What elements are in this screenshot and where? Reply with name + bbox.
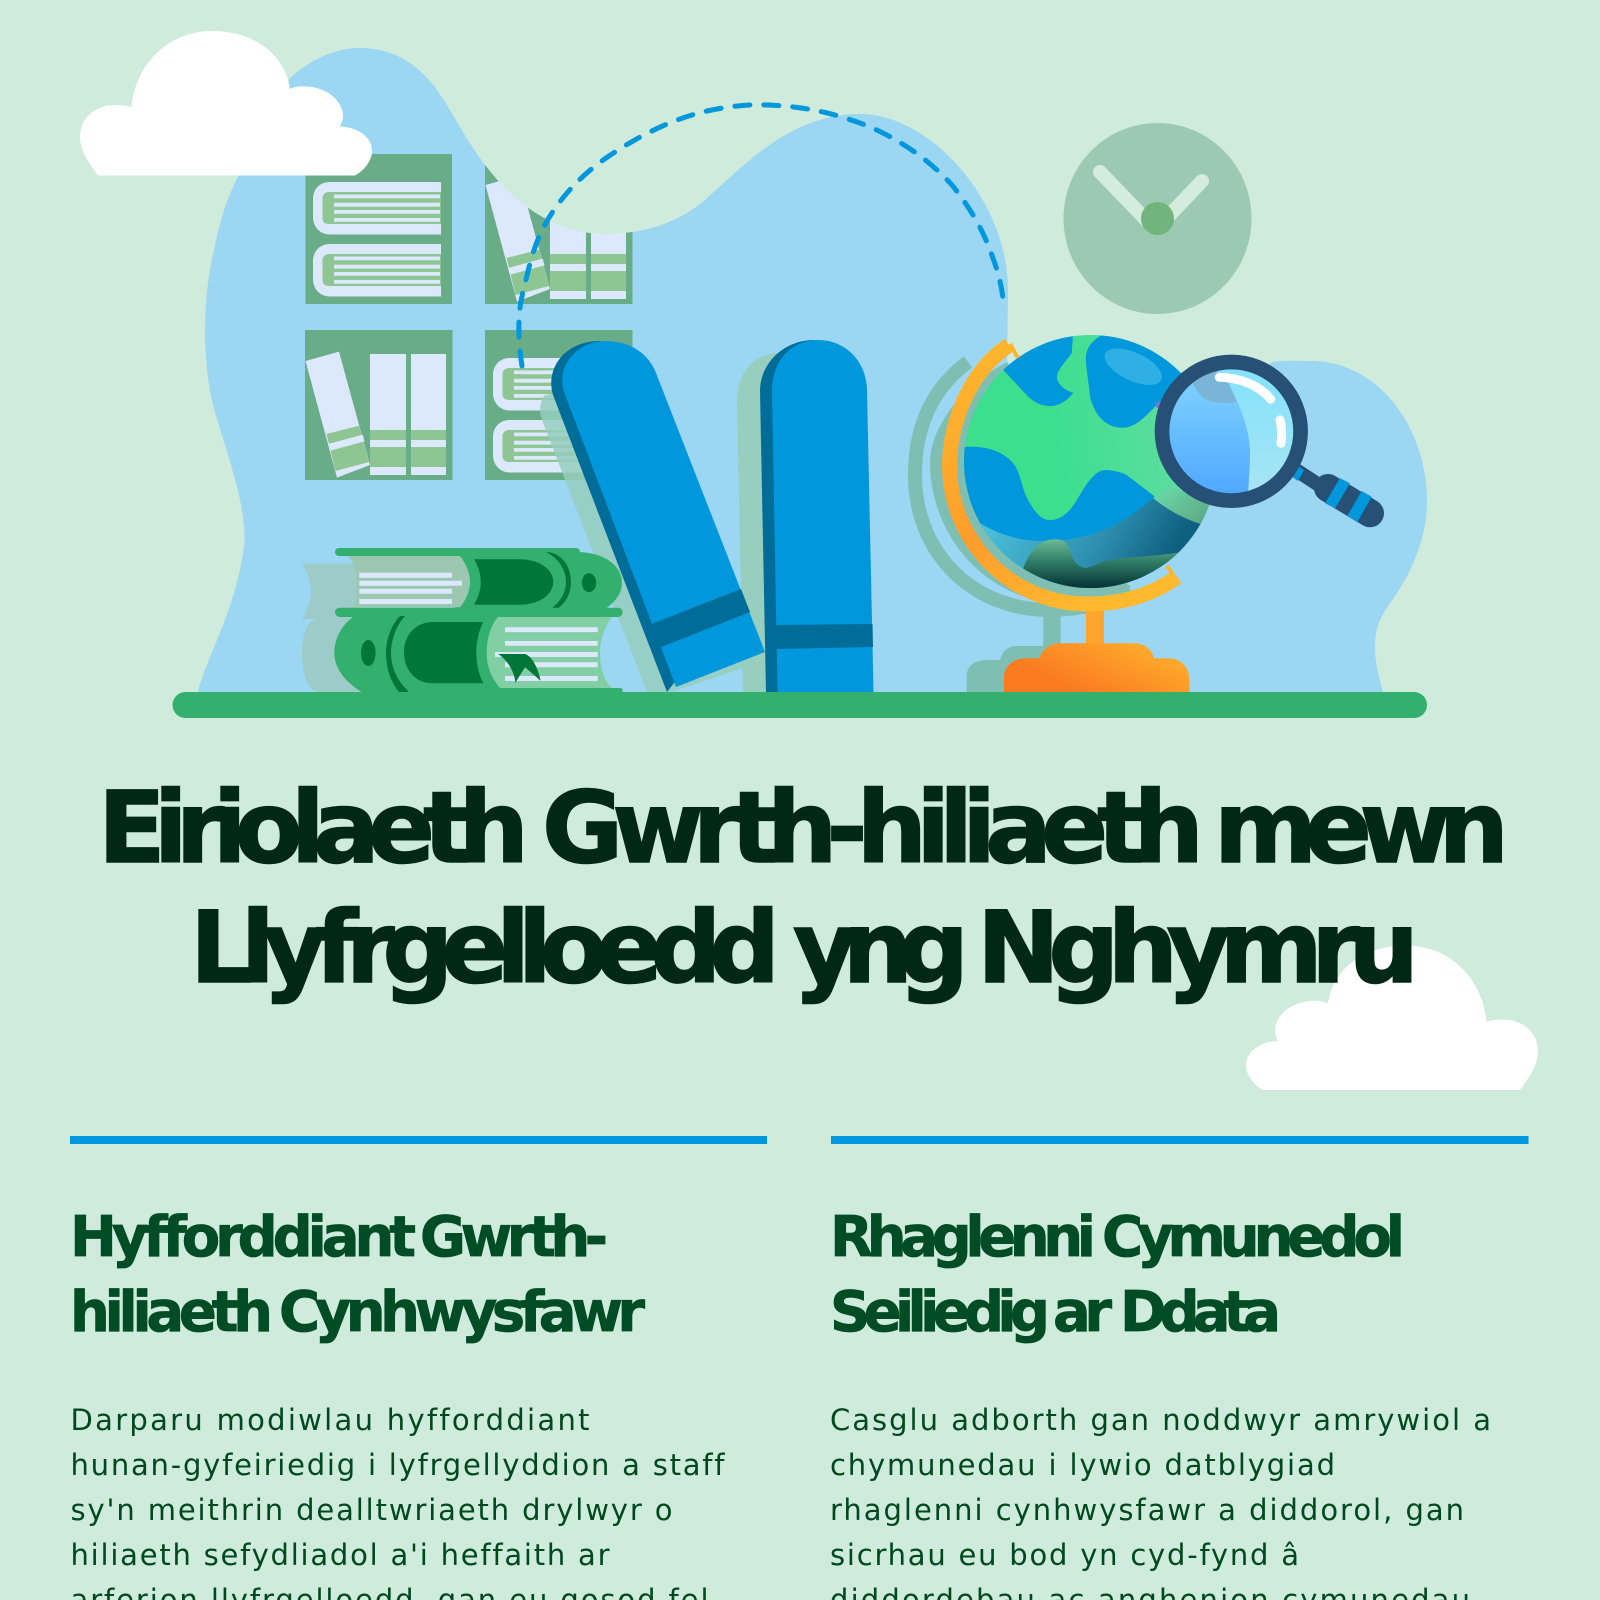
magnifying glass [1156,360,1372,522]
body text left: sy'n meithrin dealltwriaeth drylwyr o [70,1493,672,1527]
body text left: hiliaeth sefydliadol a'i heffaith ar [70,1538,610,1572]
background notch cutting the shelf [435,60,707,234]
title: Eiriolaeth [98,771,529,886]
background blue blob [198,48,1427,692]
heading right: Cymunedol [1102,1205,1405,1270]
heading left: Gwrth- [420,1205,608,1270]
book shadows [302,564,364,692]
divider left [70,1136,767,1144]
panel: right column [830,1136,1528,1600]
earth sphere [964,335,1210,588]
heading left: hiliaeth [70,1280,273,1345]
bookshelf bottom-left: upright books [305,330,452,480]
heading left: Cynhwysfawr [279,1280,645,1345]
leaning blue book [551,341,765,692]
title: Nghymru [977,891,1419,1006]
globe edge spot [1156,402,1162,408]
magnifier handle [1290,465,1372,522]
upright blue book [760,340,874,693]
bookshelf top-left: horizontal books [306,154,452,304]
body text right: chymunedau i lywio datblygiad [830,1448,1335,1482]
title: yng [793,891,969,1006]
bookmark [498,654,541,683]
magnifier lens [1169,369,1293,494]
bookshelf top-right: upright books [485,154,632,304]
body text left [70,1403,725,1600]
divider right [831,1136,1528,1144]
globe shadow [915,362,1131,692]
cloud right, behind title [1246,946,1538,1090]
globe orange meridian arc [950,344,1178,604]
cloud top left [80,31,372,176]
body text right: rhaglenni cynhwysfawr a diddorol, gan [830,1493,1464,1527]
illustration: library scene [172,48,1427,718]
heading right: Ddata [1120,1280,1281,1345]
bottom book [334,617,505,692]
top book [455,552,622,609]
title [98,771,1509,1006]
body text right: Casglu adborth gan noddwyr amrywiol a [830,1403,1491,1437]
dashed flight path arc [519,105,1003,366]
heading right: ar [1053,1280,1112,1345]
book shadows behind the tall books [540,353,820,692]
body text left: Darparu modiwlau hyfforddiant [70,1403,590,1437]
shelf ground bar [172,692,1427,718]
bookshelf bottom-right: horizontal books [485,330,632,480]
lens highlights [1219,377,1282,443]
heading right [830,1205,1405,1345]
title: Llyfrgelloedd [190,891,780,1006]
globe stand [1086,606,1104,646]
heading right: Seiliedig [830,1280,1050,1345]
heading right: Rhaglenni [830,1205,1096,1270]
globe [950,330,1230,692]
body text right: sicrhau eu bod yn cyd-fynd â [830,1538,1299,1572]
stacked green books [302,548,623,693]
panel: left column [70,1136,767,1600]
body text right [830,1403,1491,1600]
heading left [70,1205,645,1345]
wall clock [1064,123,1252,314]
magnifier ring [1162,362,1301,501]
heading left: Hyfforddiant [70,1205,416,1270]
title: Gwrth-hiliaeth [542,771,1204,886]
title: mewn [1214,771,1509,886]
body text left: hunan-gyfeiriedig i lyfrgellyddion a staff [70,1448,725,1482]
